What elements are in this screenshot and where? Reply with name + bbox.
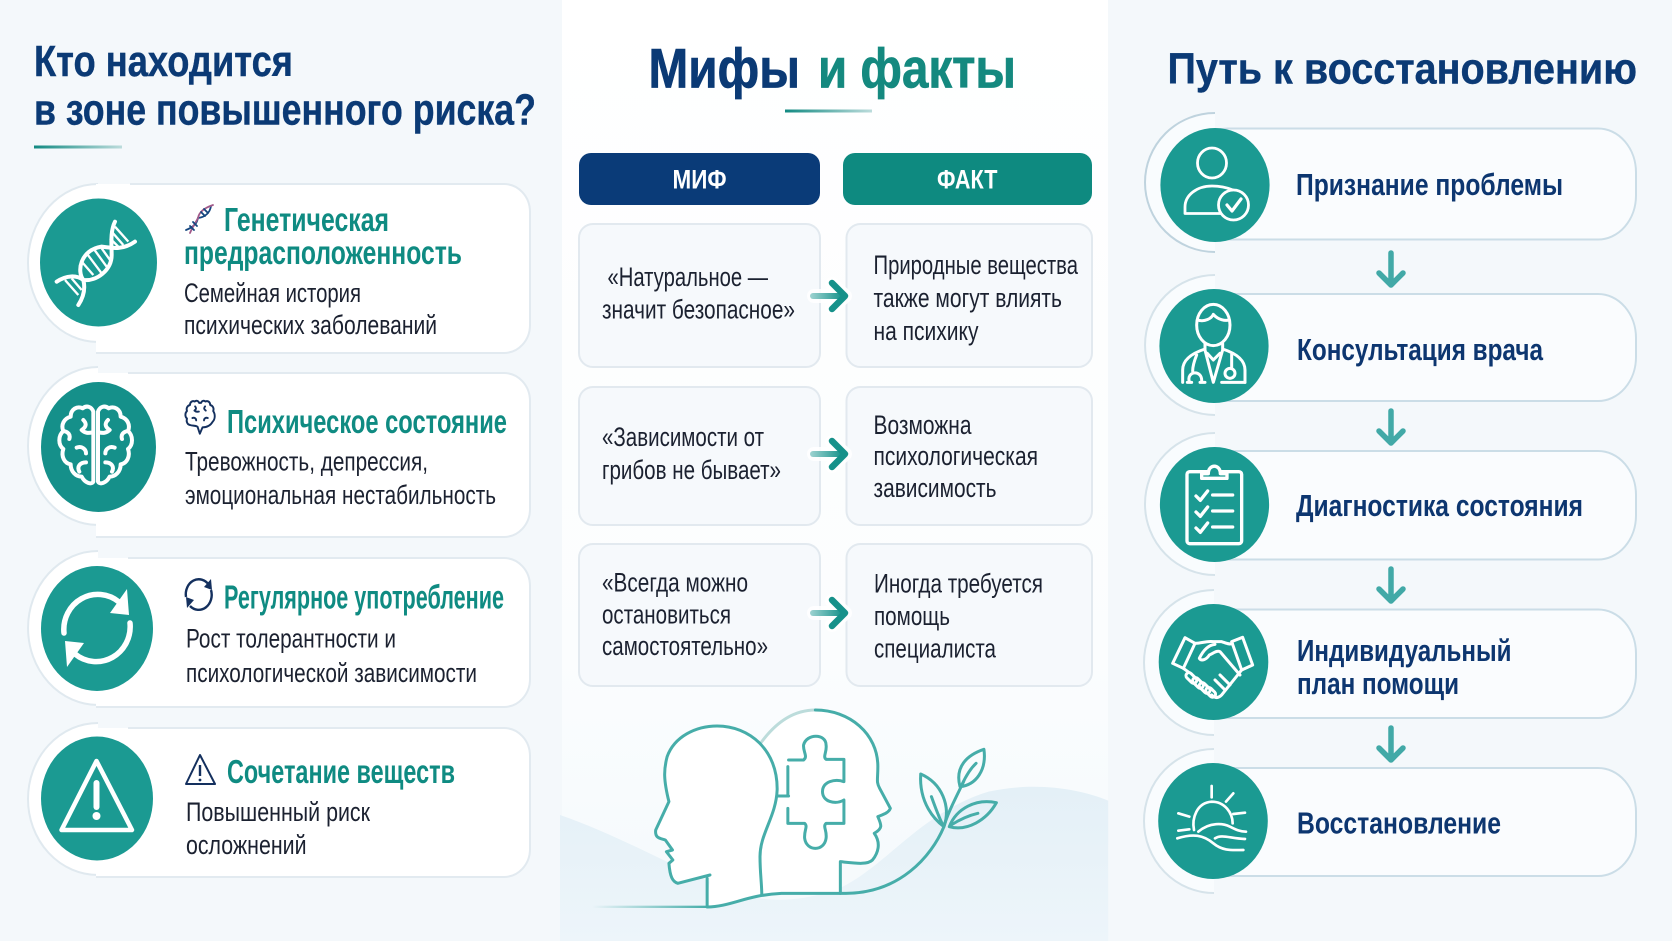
row 2 fact: Возможна [874,410,972,440]
icon: warning [41,736,153,860]
row 3 myth [579,544,820,686]
text: step 4: Индивидуальный [1297,633,1512,668]
text: step 5: Восстановление [1297,806,1501,840]
card: mental state [28,367,530,537]
header: myth: МИФ [672,164,726,194]
arrow: step 2 to 3 [1379,411,1403,443]
text: mental [185,403,507,510]
header: fact: ФАКТ [937,164,998,194]
icon: dna [40,198,157,326]
step 5 [1144,749,1636,893]
heading: myths and facts [648,36,1016,112]
arrow: row 3 [810,600,845,626]
step 1 [1145,113,1636,252]
arrow: step 1 to 2 [1379,253,1403,285]
row 1 fact [846,224,1092,367]
step 3 [1145,433,1636,575]
text: genetic: психических заболеваний [184,310,437,340]
row 1 fact: на психику [874,316,979,346]
arrow: step 3 to 4 [1379,569,1403,601]
row 3 fact [846,544,1092,686]
text: regular [186,578,504,688]
panel: myths and facts [560,0,1108,941]
text: regular: психологической зависимости [186,658,477,688]
icon: mini warning [186,755,215,784]
row 2 fact [846,387,1092,525]
row 3 myth: «Всегда можно [602,568,748,598]
card: genetic predisposition [28,184,530,353]
icon: mini dna [186,205,213,233]
icon: clipboard [1160,447,1269,562]
icon: handshake [1159,604,1268,720]
row 1 myth: значит безопасное» [602,294,795,324]
row 2 fact: зависимость [874,473,996,503]
row 1 myth [579,224,820,367]
icon: mini cycle [186,579,212,610]
heading: risk: Кто находится [34,37,293,86]
step 4 [1144,590,1636,735]
text: step 1: Признание проблемы [1296,167,1563,202]
arrow: row 2 [810,441,845,467]
text: regular: Регулярное употребление [224,578,504,616]
heading: risk [34,37,536,148]
row 3 fact: помощь [874,601,950,631]
row 2 myth [579,387,820,525]
heading: myths and facts: Мифы [648,36,800,100]
text: genetic: предрасположенность [184,234,462,271]
icon: person with check [1160,128,1270,242]
icon: doctor [1159,289,1269,403]
row 2 myth: «Зависимости от [602,422,764,452]
row 3 myth: остановиться [602,600,731,630]
row 1 myth: «Натуральное — [608,262,768,292]
text: step 3: Диагностика состояния [1296,488,1583,523]
card: substance combination [28,723,530,877]
heading: myths and facts: и факты [818,36,1016,100]
card: regular use [28,551,530,707]
row 3 fact: специалиста [874,634,997,664]
text: step 2: Консультация врача [1297,332,1544,367]
row 2 fact: психологическая [874,441,1038,471]
text: mental: Тревожность, депрессия, [185,446,428,476]
text: combination: осложнений [186,830,306,860]
panel: recovery path [1144,44,1637,893]
icon: cycle [41,566,153,691]
text: step 4 [1297,633,1512,701]
icon: mini brain [185,401,215,434]
text: mental: Психическое состояние [227,403,507,440]
text: genetic: Семейная история [184,278,361,308]
row 2 myth: грибов не бывает» [602,455,781,485]
arrow: row 1 [810,283,845,309]
text: step 4: план помощи [1297,666,1459,701]
illustration: heads, puzzle and sprout [560,710,1108,941]
icon: sunrise over waves [1158,763,1268,879]
header: myth [579,153,820,205]
text: genetic [184,201,462,340]
text: combination [186,753,455,860]
text: regular: Рост толерантности и [186,624,396,654]
arrow: step 4 to 5 [1379,728,1403,760]
step 2 [1145,275,1636,415]
text: genetic: Генетическая [224,201,389,238]
heading: risk: в зоне повышенного риска? [34,86,536,134]
row 3 fact: Иногда требуется [874,568,1043,598]
text: combination: Повышенный риск [186,797,370,827]
text: combination: Сочетание веществ [227,753,455,790]
row 3 myth: самостоятельно» [602,631,768,661]
row 1 fact: также могут влиять [874,283,1062,313]
icon: brain [41,382,156,512]
text: mental: эмоциональная нестабильность [185,480,496,510]
row 1 fact: Природные вещества [874,250,1079,280]
header: fact [843,153,1092,205]
